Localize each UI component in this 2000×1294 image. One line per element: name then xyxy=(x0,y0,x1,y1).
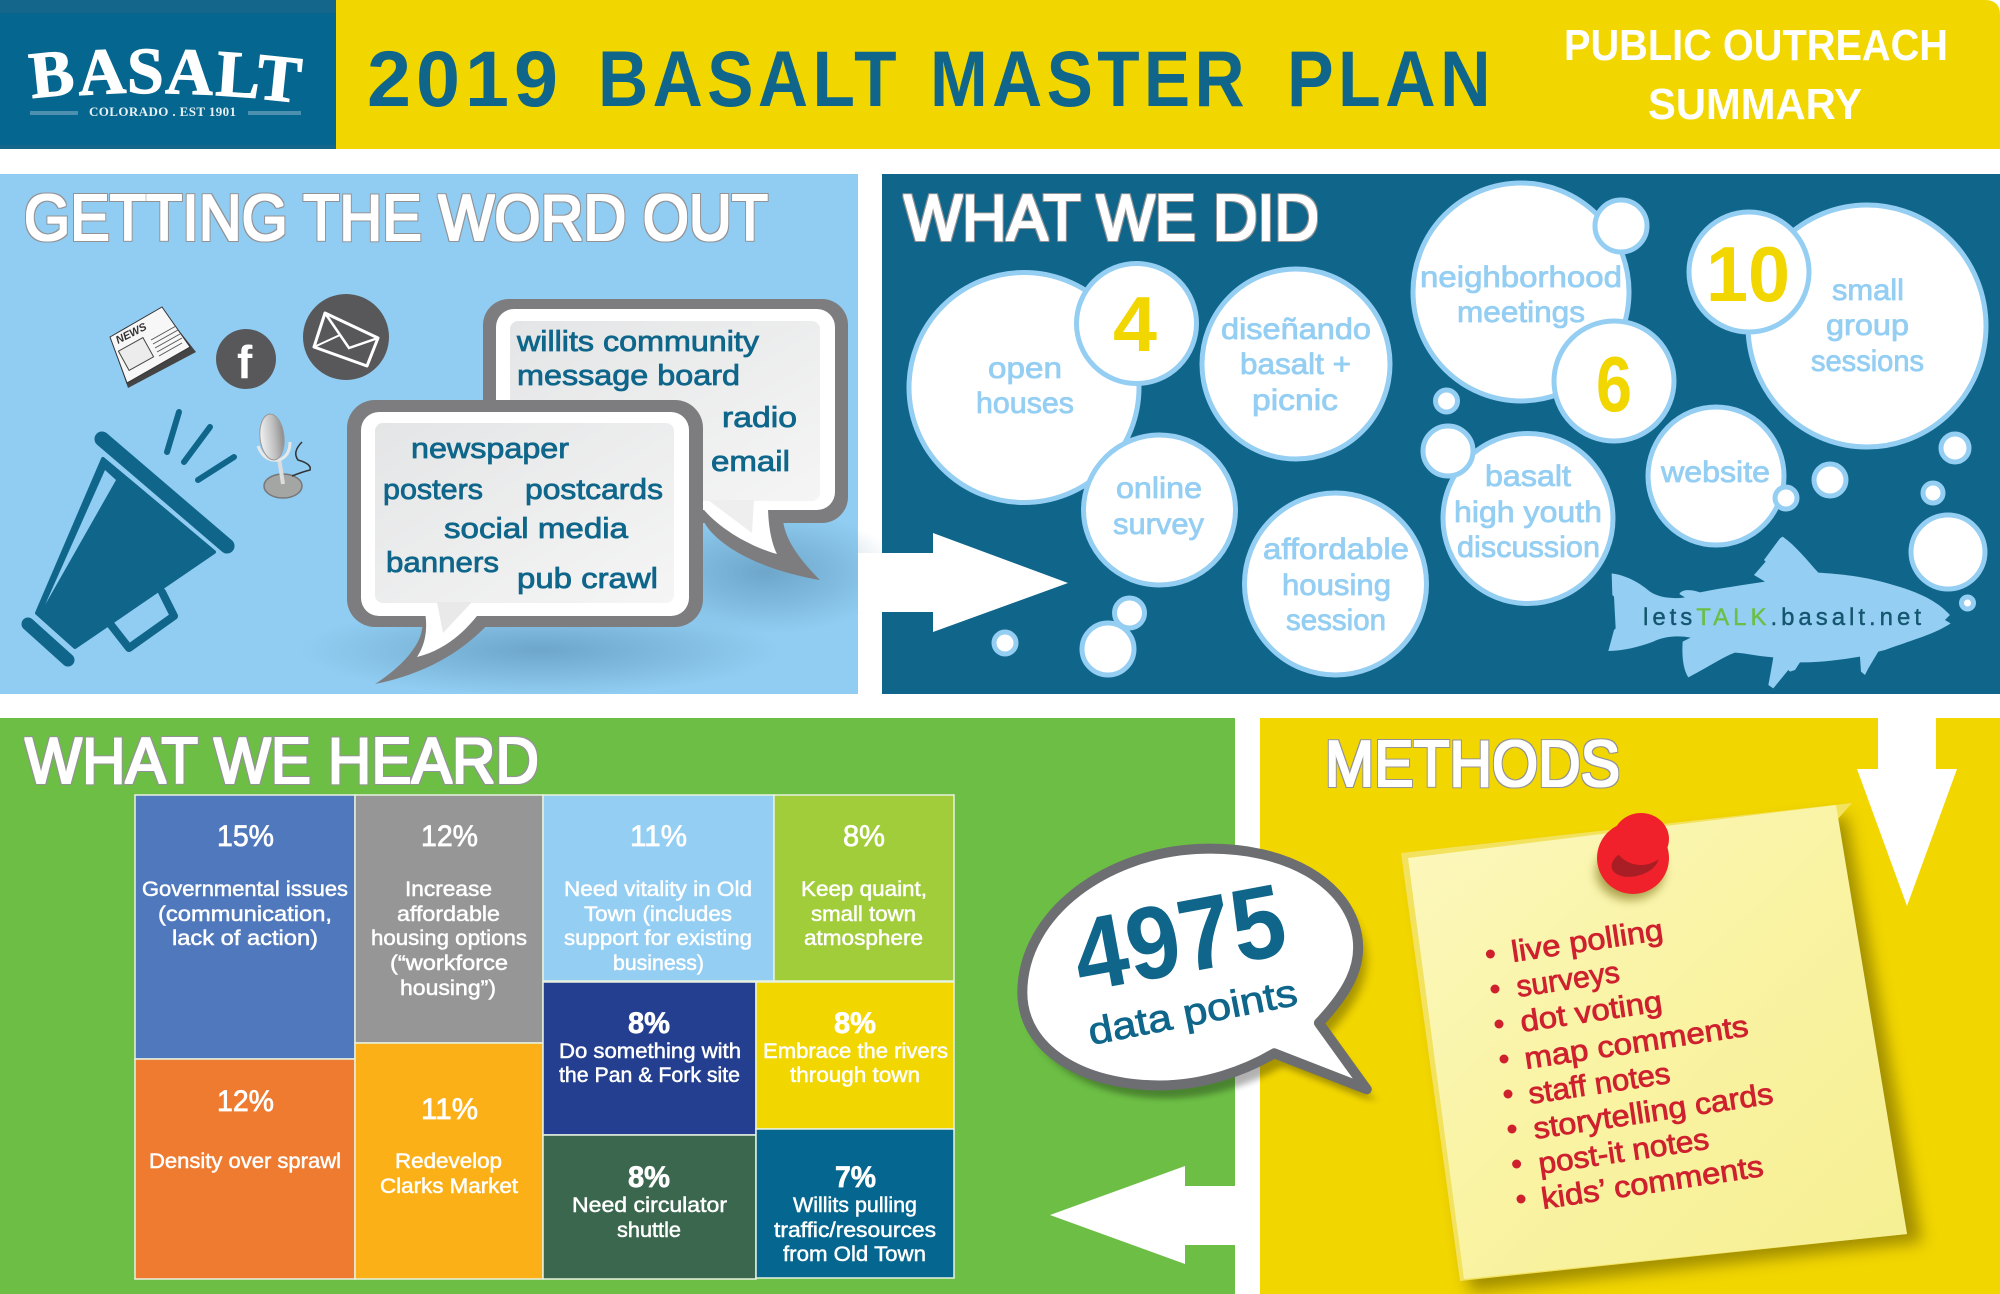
cell: governmental issues: 15% xyxy=(217,820,274,853)
bubble labels: basalt + xyxy=(1240,348,1351,381)
list: map comments xyxy=(1522,1010,1751,1076)
cell: rivers: 8% xyxy=(834,1007,876,1040)
bubble numbers xyxy=(1113,230,1790,428)
speech bubble shadows xyxy=(300,510,900,696)
cell: governmental issues: (communication, xyxy=(158,903,332,926)
arrow: what we did to methods xyxy=(1857,694,1957,906)
bubble text: newspaper xyxy=(411,433,569,465)
bubble text: social media xyxy=(444,513,629,545)
bubble text xyxy=(383,433,663,595)
cell: keep quaint: 8% xyxy=(843,820,885,853)
cell: rivers: Embrace the rivers xyxy=(763,1040,948,1063)
cell: circulator shuttle: shuttle xyxy=(617,1219,681,1242)
list: staff notes xyxy=(1526,1057,1672,1111)
cell: keep quaint: Keep quaint, xyxy=(801,878,927,901)
cell: circulator shuttle xyxy=(572,1161,727,1242)
cell: governmental issues xyxy=(142,820,348,950)
bubble labels: basalt xyxy=(1485,460,1572,493)
cell: rivers xyxy=(763,1007,948,1087)
cell: keep quaint: atmosphere xyxy=(804,927,923,950)
bubble text: email xyxy=(711,446,790,478)
speech bubble: front xyxy=(347,400,703,684)
arrow: methods to what we heard xyxy=(1050,1166,1260,1264)
cell: pan and fork: the Pan & Fork site xyxy=(559,1064,740,1087)
bubble labels: discussion xyxy=(1457,531,1600,564)
cell: affordable housing: 12% xyxy=(421,820,478,853)
list: dot voting xyxy=(1518,985,1664,1039)
panel: methods xyxy=(1260,718,2000,1294)
bubble labels: houses xyxy=(976,387,1074,420)
cell: vitality in old town: business) xyxy=(613,952,704,975)
list: post-it notes xyxy=(1536,1123,1711,1181)
heading: GETTING THE WORD OUT xyxy=(24,181,768,254)
main title: BASALT xyxy=(598,34,901,123)
sticky note xyxy=(1401,803,1922,1292)
cell: pan and fork xyxy=(559,1007,741,1087)
cell: vitality in old town: Need vitality in Old xyxy=(564,878,752,901)
bubble labels: group xyxy=(1826,309,1909,342)
cell: willits: Willits pulling xyxy=(793,1194,917,1217)
subtitle xyxy=(1564,21,1948,129)
cell: clarks market: Redevelop xyxy=(395,1150,502,1173)
bubble labels: picnic xyxy=(1252,384,1338,417)
main title xyxy=(367,34,1495,123)
cell: governmental issues: Governmental issues xyxy=(142,878,348,901)
cell: willits xyxy=(774,1161,936,1266)
cell: circulator shuttle: Need circulator xyxy=(572,1194,727,1217)
heading: WHAT WE DID xyxy=(904,181,1319,254)
heading: WHAT WE HEARD xyxy=(25,724,539,797)
bubble text: radio xyxy=(722,402,797,434)
cell: willits: from Old Town xyxy=(783,1243,926,1266)
cell: vitality in old town: 11% xyxy=(630,820,687,853)
cell: affordable housing: Increase xyxy=(405,878,492,901)
bubble text xyxy=(516,326,797,478)
arrow: word out to what we did xyxy=(858,533,1068,632)
logo block: COLORADO . EST 1901 xyxy=(89,104,236,119)
cell: willits: 7% xyxy=(835,1161,876,1194)
cell: density over sprawl: 12% xyxy=(217,1085,274,1118)
list: kids’ comments xyxy=(1539,1150,1766,1216)
list xyxy=(1486,914,1775,1216)
bubbles xyxy=(909,183,1986,675)
bubble labels: diseñando xyxy=(1221,313,1371,346)
cell: density over sprawl xyxy=(149,1085,341,1173)
cell: vitality in old town: support for existing xyxy=(564,927,752,950)
panel: what we did xyxy=(882,174,2000,694)
cell: density over sprawl: Density over sprawl xyxy=(149,1150,341,1173)
cell: vitality in old town: Town (includes xyxy=(584,903,732,926)
callout: 4975 data points: data points xyxy=(1085,972,1301,1054)
bubble numbers: 4 xyxy=(1113,280,1157,368)
cell: affordable housing: housing”) xyxy=(400,977,496,1000)
bubble labels: open xyxy=(988,352,1062,385)
cell: governmental issues: lack of action) xyxy=(172,927,318,950)
bubble numbers: 6 xyxy=(1596,340,1632,428)
icon: facebook: f xyxy=(237,336,253,388)
panel: what we heard xyxy=(0,718,1235,1294)
cell: affordable housing: (“workforce xyxy=(390,952,508,975)
bubble labels: meetings xyxy=(1457,296,1585,329)
logo block: BASALT xyxy=(26,35,305,118)
cell: affordable housing: affordable xyxy=(397,903,500,926)
cell: keep quaint: small town xyxy=(811,903,916,926)
bubble text: postcards xyxy=(525,474,663,506)
cell: clarks market: Clarks Market xyxy=(380,1175,518,1198)
bubble labels: sessions xyxy=(1811,345,1924,378)
bubble labels xyxy=(976,261,1924,637)
bubble labels: high youth xyxy=(1454,496,1602,529)
bubble labels: housing xyxy=(1282,569,1391,602)
cell: clarks market xyxy=(380,1093,518,1198)
subtitle: PUBLIC OUTREACH xyxy=(1564,21,1948,70)
speech bubble: back xyxy=(483,299,848,580)
cell: clarks market: 11% xyxy=(421,1093,478,1126)
main title: MASTER xyxy=(930,34,1249,123)
bubble text: banners xyxy=(386,547,499,579)
list: storytelling cards xyxy=(1531,1078,1775,1146)
icon: newspaper: NEWS xyxy=(114,321,149,347)
bubble labels: website xyxy=(1660,456,1770,489)
logo block xyxy=(0,0,336,149)
bubble numbers: 10 xyxy=(1706,230,1790,318)
bubble labels: affordable xyxy=(1263,533,1409,566)
cell: circulator shuttle: 8% xyxy=(628,1161,670,1194)
bubble labels: survey xyxy=(1113,508,1204,541)
bubble text: posters xyxy=(383,474,483,506)
cell: keep quaint xyxy=(801,820,927,950)
bubble labels: small xyxy=(1832,274,1904,307)
cell: pan and fork: Do something with xyxy=(559,1040,741,1063)
cell: pan and fork: 8% xyxy=(628,1007,670,1040)
icon: envelope xyxy=(303,294,389,380)
heading: METHODS xyxy=(1325,727,1620,800)
pin xyxy=(1596,813,1669,900)
main title: PLAN xyxy=(1287,34,1495,123)
callout: 4975 data points: 4975 xyxy=(1064,862,1294,1014)
cell: willits: traffic/resources xyxy=(774,1219,936,1242)
icon: trout with website xyxy=(1608,537,1951,688)
panel: getting the word out xyxy=(0,174,900,696)
list: live polling xyxy=(1509,914,1665,969)
cell: affordable housing xyxy=(371,820,527,1000)
icon: microphone xyxy=(258,413,310,498)
cell: vitality in old town xyxy=(564,820,752,975)
icon: trout with website: letsTALK.basalt.net xyxy=(1643,604,1921,631)
treemap xyxy=(135,795,954,1279)
icon: facebook xyxy=(216,329,276,389)
bubble labels: neighborhood xyxy=(1420,261,1622,294)
bubble labels: online xyxy=(1116,472,1202,505)
main title: 2019 xyxy=(367,34,563,123)
cell: affordable housing: housing options xyxy=(371,927,527,950)
bubble text: pub crawl xyxy=(517,563,658,595)
cell: rivers: through town xyxy=(790,1064,920,1087)
bubble labels: session xyxy=(1286,604,1386,637)
header band xyxy=(0,0,2000,149)
callout: 4975 data points xyxy=(1022,849,1375,1102)
subtitle: SUMMARY xyxy=(1648,80,1862,129)
list: surveys xyxy=(1514,956,1622,1004)
bubble text: willits community xyxy=(516,326,760,358)
icon: megaphone xyxy=(28,412,234,660)
bubble text: message board xyxy=(517,360,740,392)
icon: newspaper xyxy=(110,307,196,388)
